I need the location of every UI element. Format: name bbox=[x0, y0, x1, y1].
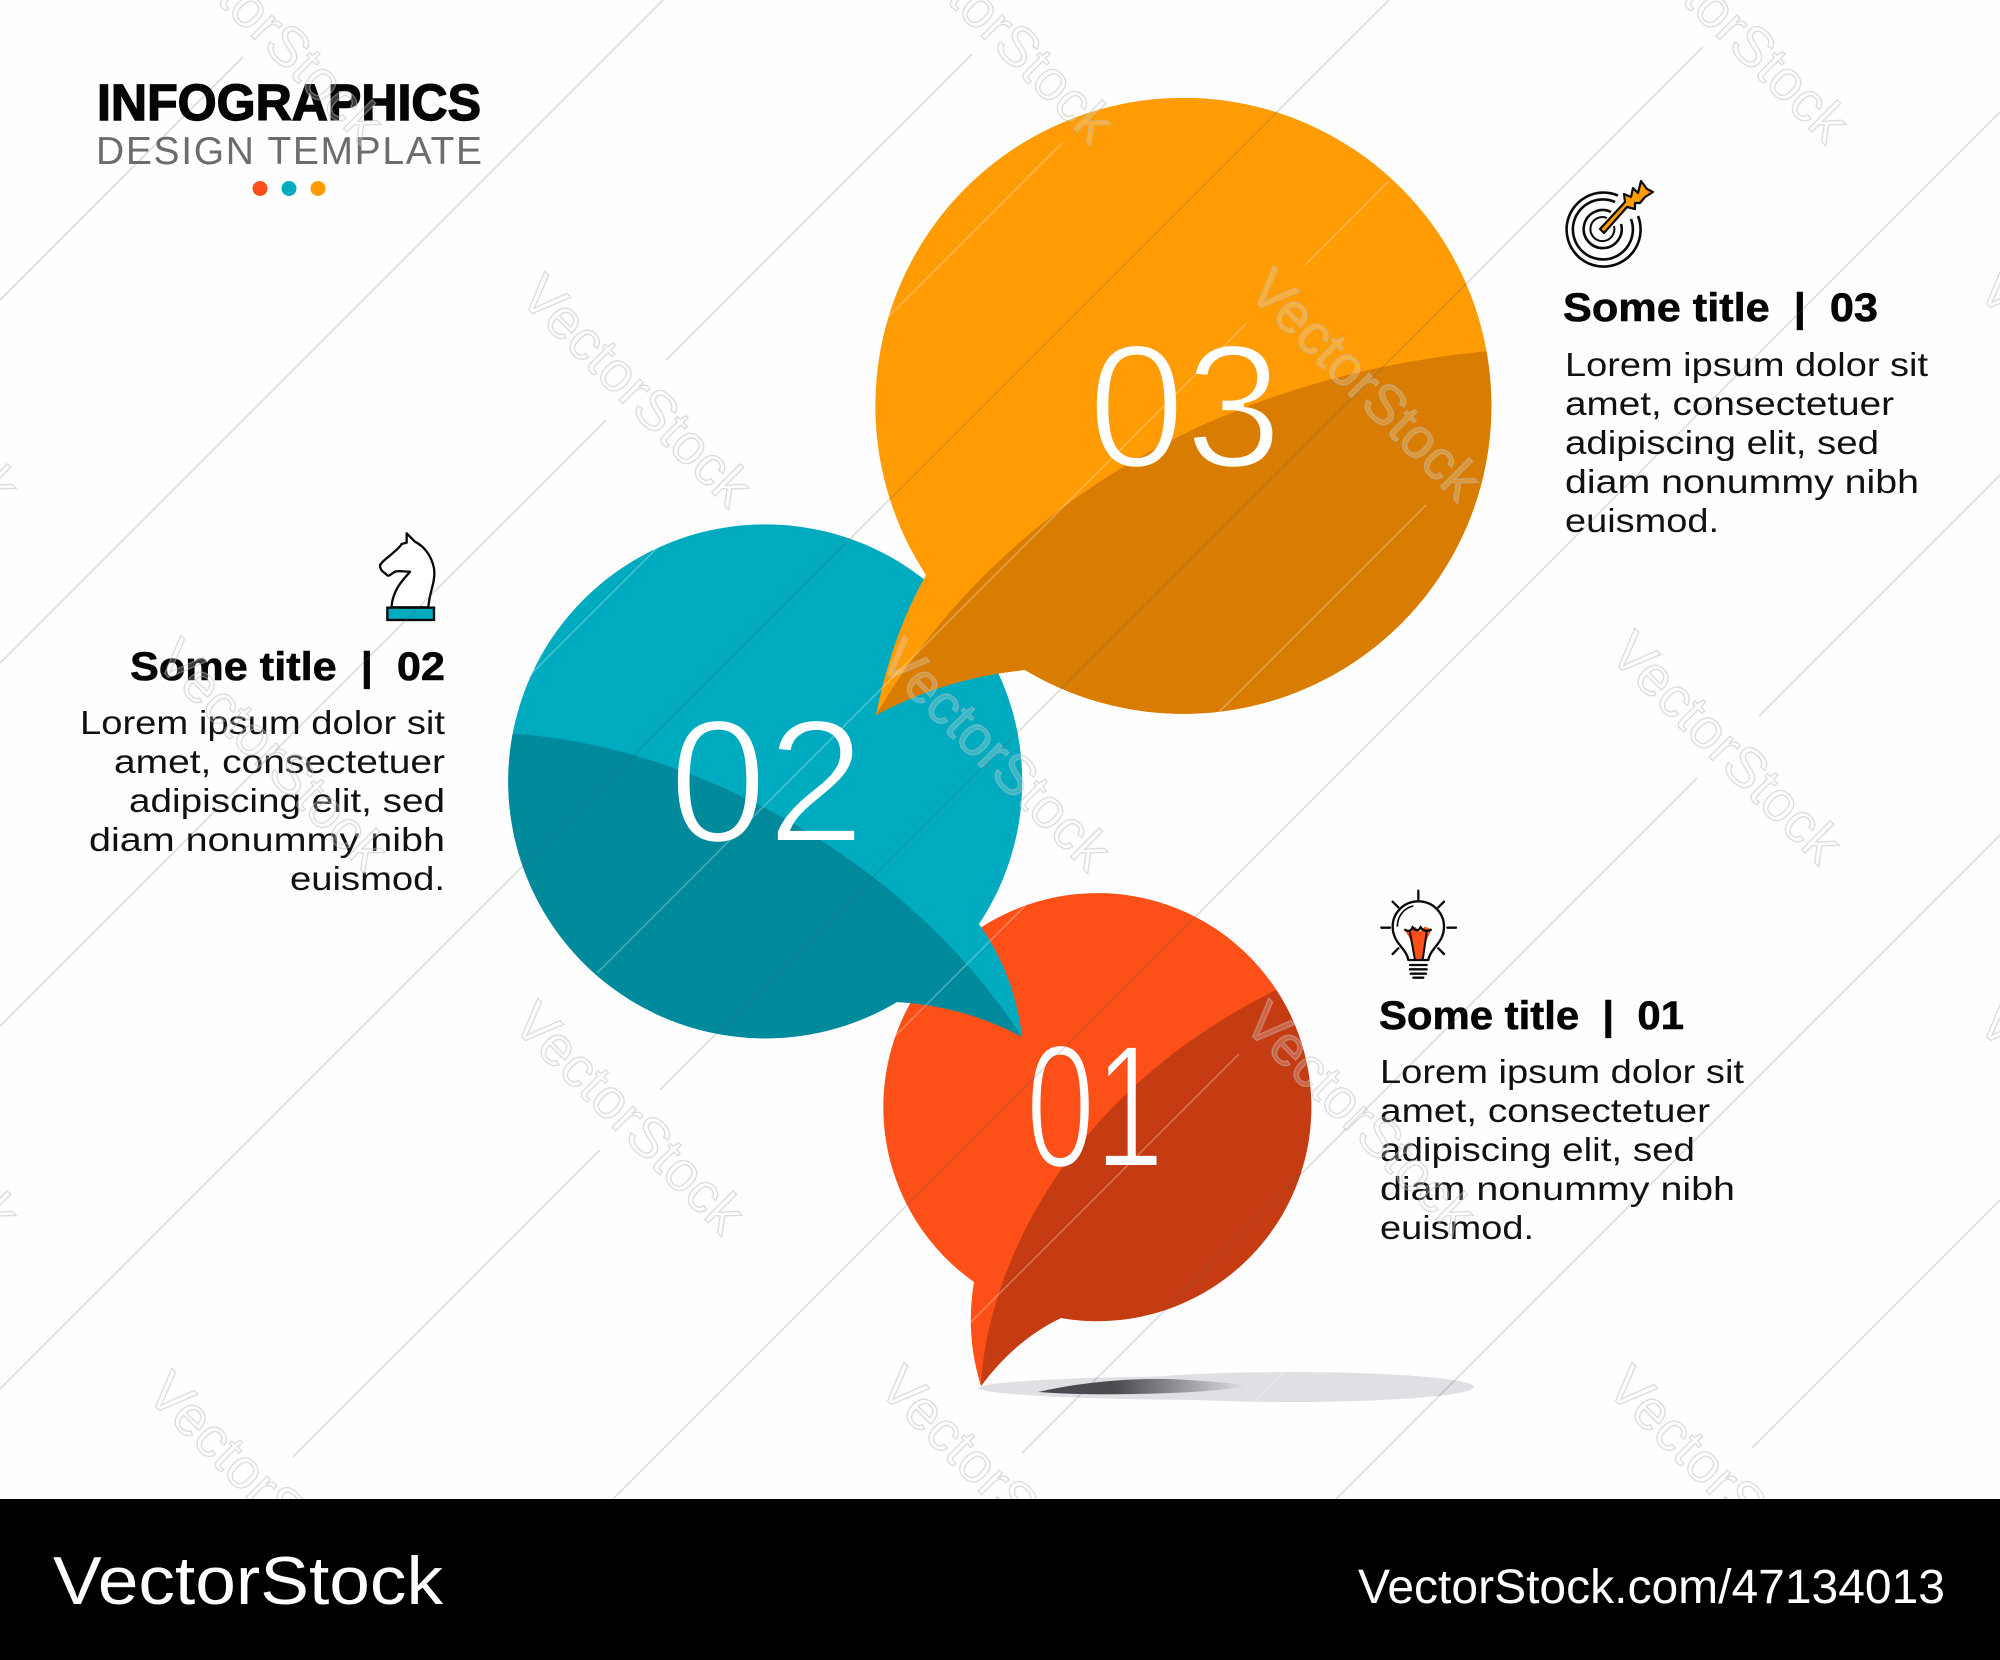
watermark text: VectorStock bbox=[509, 262, 765, 519]
watermark text: VectorStock bbox=[868, 626, 1124, 883]
icon: light bulb bbox=[1381, 891, 1456, 978]
icon: chess knight bbox=[380, 533, 434, 620]
text block: 02: Some title | 02 bbox=[130, 645, 445, 689]
text block: 02: diam nonummy nibh bbox=[89, 821, 445, 858]
watermark text: VectorStock bbox=[502, 989, 758, 1246]
text block: 03: Some title | 03 bbox=[1563, 286, 1878, 330]
text block: 03: diam nonummy nibh bbox=[1565, 463, 1919, 500]
text block: 01: Some title | 01 bbox=[1379, 994, 1684, 1038]
text block: 02: euismod. bbox=[290, 860, 445, 897]
number 01: 01 bbox=[1026, 1009, 1164, 1205]
number 02: 02 bbox=[669, 684, 865, 880]
watermark text: VectorStock bbox=[868, 1353, 1124, 1610]
speech bubble: 02 teal bbox=[508, 524, 1022, 1038]
text block: 03: amet, consectetuer bbox=[1565, 385, 1894, 422]
footer bar: VectorStock.com/47134013 bbox=[1358, 1561, 1945, 1614]
text block: 01: diam nonummy nibh bbox=[1380, 1170, 1735, 1207]
footer bar: VectorStock bbox=[53, 1543, 444, 1619]
watermark text: VectorStock bbox=[1238, 256, 1494, 513]
watermark lines: light bbox=[530, 142, 1426, 1399]
number 03: 03 bbox=[1088, 309, 1282, 505]
watermark text: VectorStock bbox=[1599, 619, 1855, 876]
watermark text: VectorStock bbox=[145, 626, 401, 883]
icon: target with dart bbox=[1567, 181, 1653, 267]
text block: 03: Lorem ipsum dolor sit bbox=[1565, 346, 1928, 383]
watermark text: VectorStock bbox=[1596, 1353, 1852, 1610]
text block: 03 bbox=[1563, 286, 1928, 539]
text block: 01: amet, consectetuer bbox=[1380, 1092, 1710, 1129]
heading: INFOGRAPHICS bbox=[97, 74, 481, 131]
ground shadow bbox=[979, 1372, 1474, 1402]
text block: 02: adipiscing elit, sed bbox=[129, 782, 445, 819]
text block: 01: euismod. bbox=[1380, 1209, 1534, 1246]
heading: DESIGN TEMPLATE bbox=[96, 130, 482, 173]
text block: 03: adipiscing elit, sed bbox=[1565, 424, 1879, 461]
footer bar bbox=[0, 1499, 2000, 1660]
watermark text: VectorStock bbox=[1233, 989, 1489, 1246]
text block: 01: Lorem ipsum dolor sit bbox=[1380, 1053, 1744, 1090]
text block: 01 bbox=[1379, 994, 1744, 1246]
watermark text: VectorStock bbox=[136, 1359, 392, 1616]
text block: 01: adipiscing elit, sed bbox=[1380, 1131, 1695, 1168]
speech bubble: 03 orange bbox=[875, 98, 1492, 715]
heading bbox=[96, 74, 482, 196]
text block: 02: amet, consectetuer bbox=[114, 743, 445, 780]
text block: 03: euismod. bbox=[1565, 502, 1719, 539]
text block: 02 bbox=[80, 645, 445, 897]
speech bubble: 01 red bbox=[883, 893, 1340, 1400]
text block: 02: Lorem ipsum dolor sit bbox=[80, 704, 445, 741]
